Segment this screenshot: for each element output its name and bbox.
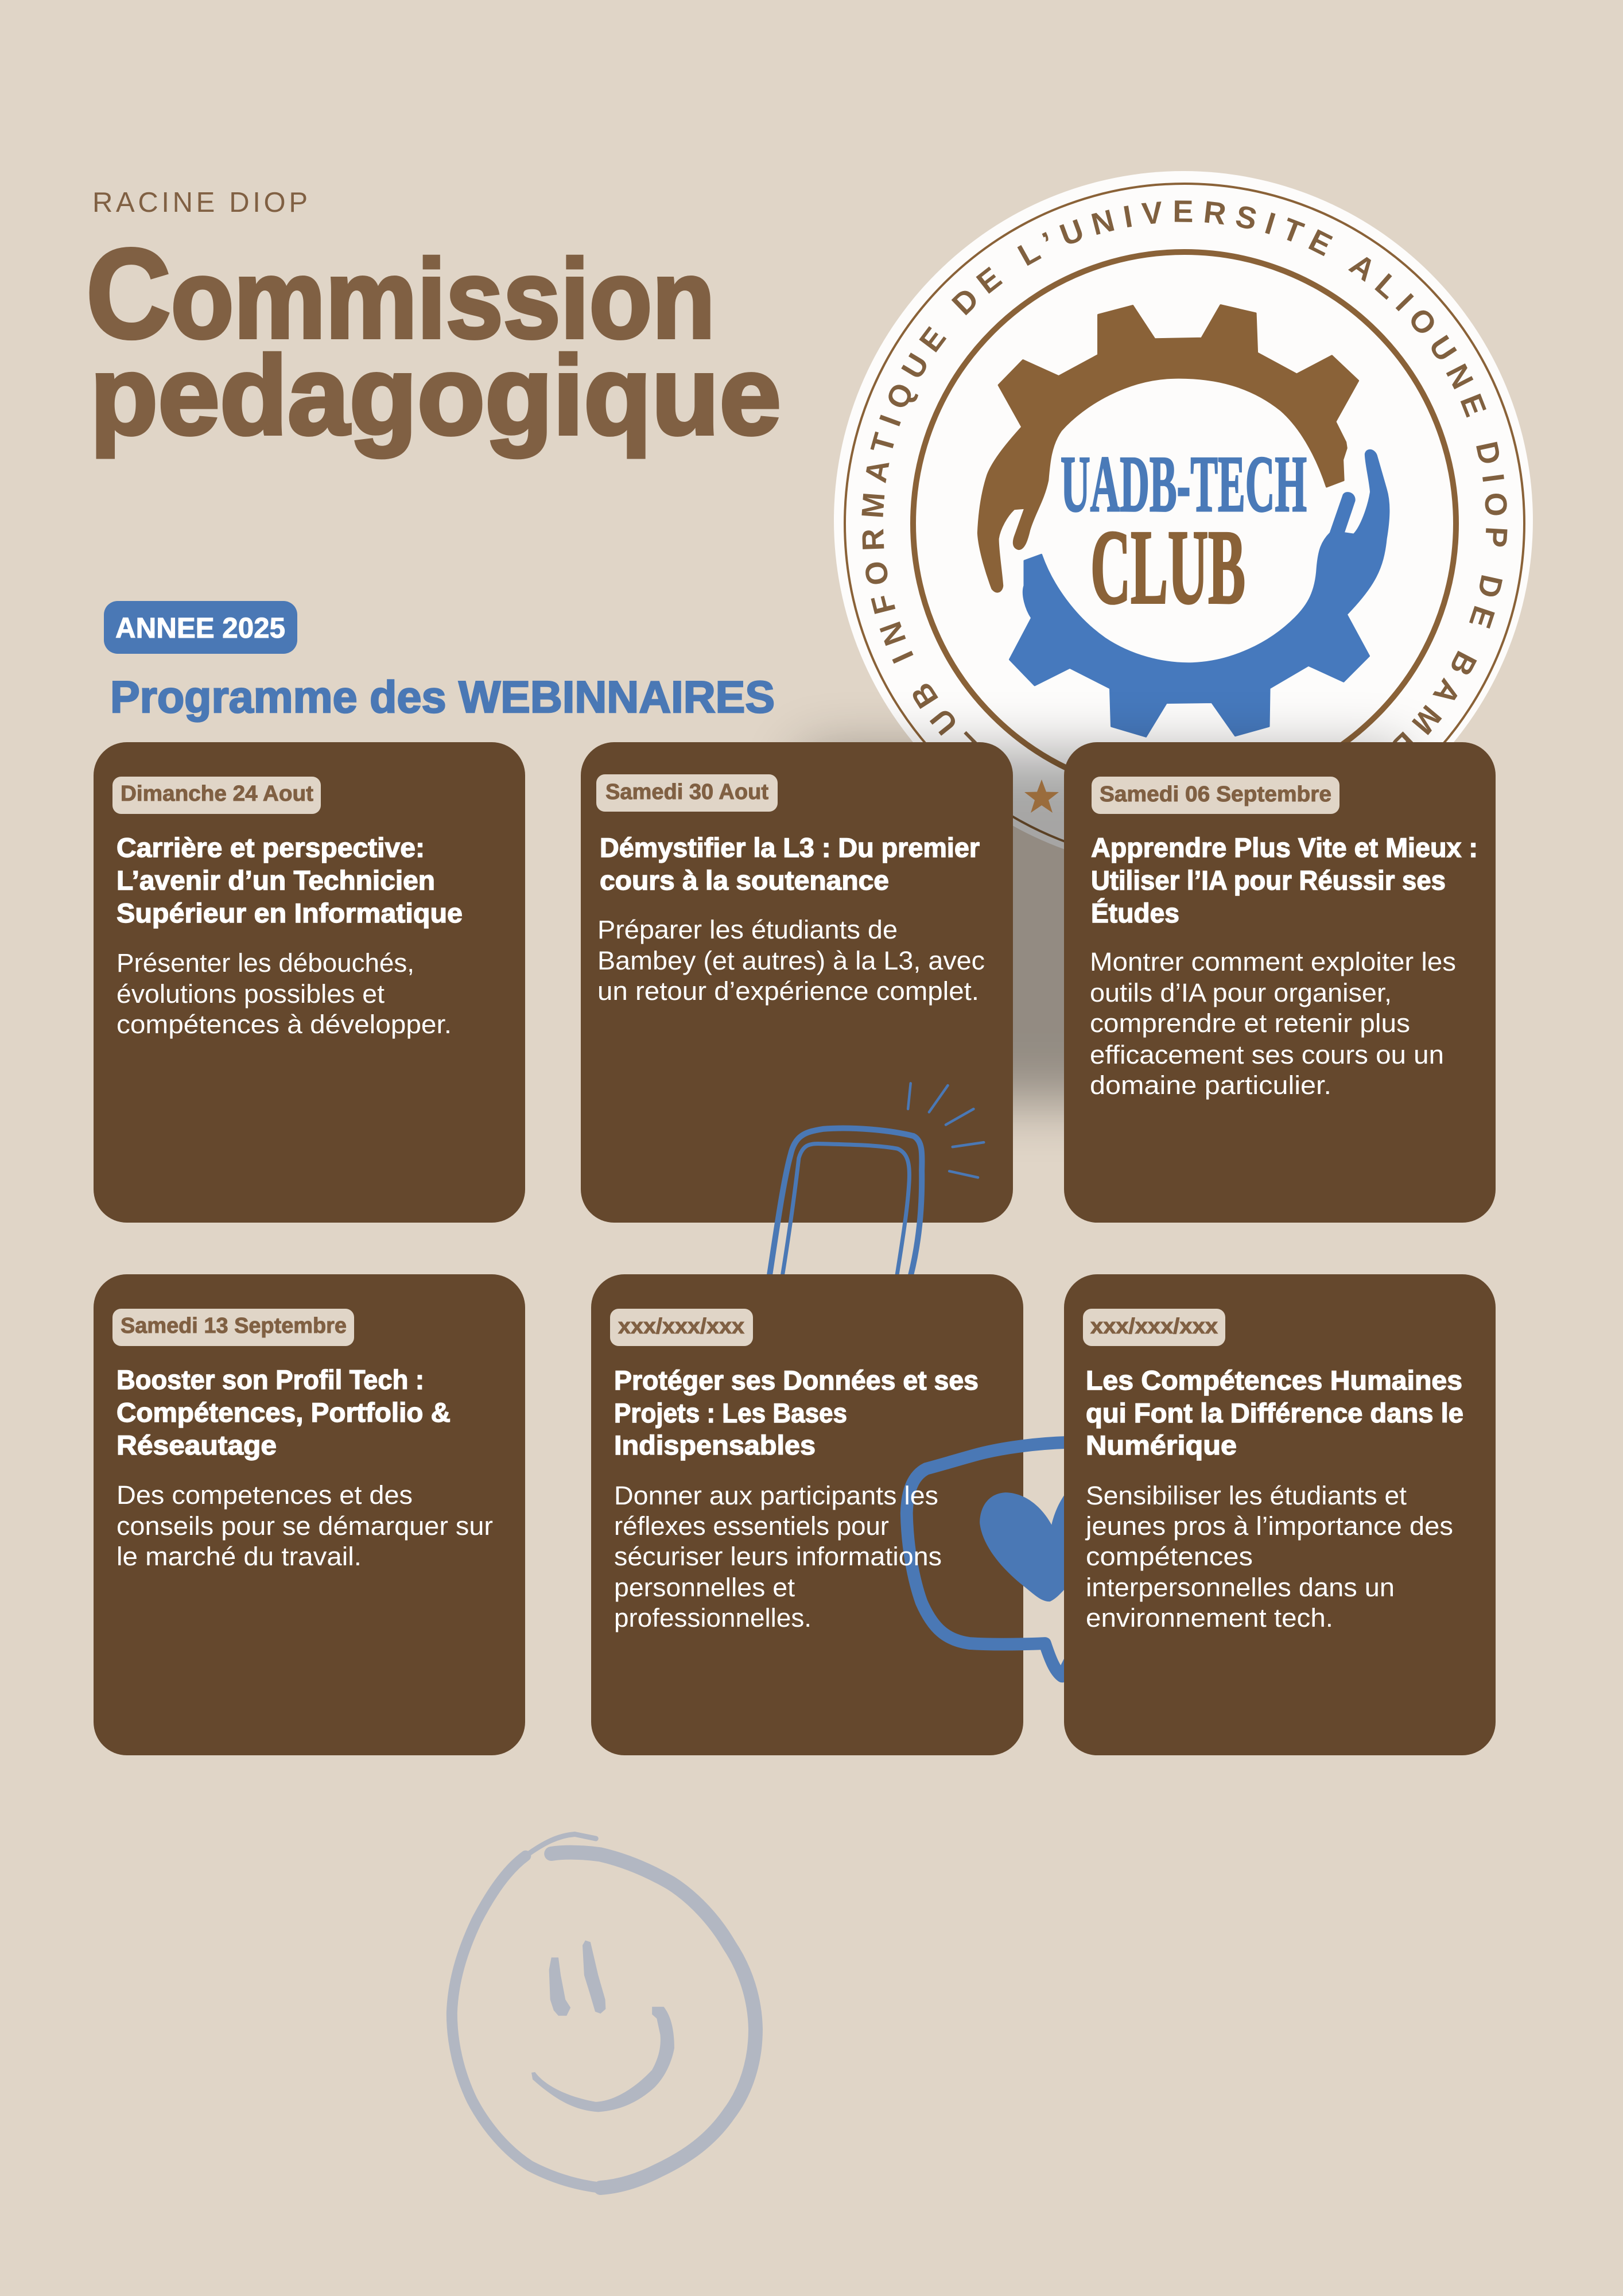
programme heading: Programme des WEBINNAIRES [110, 672, 775, 722]
logo: UADB-TECH club badge [834, 171, 1533, 850]
card description: personnelles et [614, 1573, 795, 1602]
date tag: Samedi 30 Aout [605, 780, 768, 804]
date tag: xxx/xxx/xxx [618, 1314, 744, 1339]
card description: professionnelles. [614, 1603, 812, 1632]
date tag: xxx/xxx/xxx [1090, 1314, 1218, 1339]
card description: Donner aux participants les [614, 1481, 938, 1510]
card title: Démystifier la L3 : Du premier [600, 832, 980, 863]
author name: RACINE DIOP [92, 187, 308, 218]
card title: Protéger ses Données et ses [614, 1365, 979, 1395]
card: Samedi 06 Septembre [1064, 742, 1496, 1223]
date tag [596, 774, 778, 812]
card title: Compétences, Portfolio & [117, 1397, 451, 1428]
date tag: Samedi 06 Septembre [1100, 782, 1331, 806]
title [86, 223, 781, 458]
card description: compétences à développer. [117, 1010, 452, 1039]
title: Commission [86, 223, 715, 365]
card: Protéger ses Données [591, 1274, 1071, 1755]
card title: Supérieur en Informatique [117, 898, 463, 928]
date tag [1092, 777, 1339, 814]
card description: outils d’IA pour organiser, [1090, 978, 1392, 1007]
card title: cours à la soutenance [600, 865, 889, 895]
card description: efficacement ses cours ou un [1090, 1040, 1444, 1069]
card description: Présenter les débouchés, [117, 948, 414, 978]
card title: Carrière et perspective: [117, 832, 425, 863]
date tag: Dimanche 24 Aout [121, 782, 313, 806]
card description: compétences [1086, 1542, 1253, 1571]
card description [597, 915, 985, 1006]
card description: Des competences et des [117, 1480, 413, 1510]
card description [117, 948, 452, 1039]
card description: sécuriser leurs informations [614, 1542, 942, 1571]
card title: qui Font la Différence dans le [1086, 1398, 1463, 1428]
icon: hand-drawn smiley [452, 1835, 755, 2188]
card title [1091, 832, 1478, 928]
card description: Montrer comment exploiter les [1090, 947, 1456, 976]
logo wordmark: CLUB: CLUB [1090, 509, 1245, 626]
card title [117, 832, 463, 928]
date tag [610, 1309, 753, 1346]
card: Samedi 30 Aout [581, 742, 1013, 1223]
card title: Apprendre Plus Vite et Mieux : [1091, 832, 1478, 863]
logo star [1024, 779, 1059, 813]
card title: L’avenir d’un Technicien [117, 865, 435, 895]
card title: Utiliser l’IA pour Réussir ses [1091, 865, 1446, 895]
date tag [112, 1309, 354, 1346]
logo gear: brown half with hand [978, 305, 1389, 736]
title: pedagogique [90, 333, 781, 458]
card description: le marché du travail. [117, 1542, 362, 1571]
card description [1090, 947, 1456, 1100]
card title: Réseautage [117, 1430, 277, 1460]
card title: Numérique [1086, 1430, 1237, 1460]
card description: interpersonnelles dans un [1086, 1573, 1395, 1602]
logo gear: blue half with hand [1009, 450, 1389, 736]
card description: conseils pour se démarquer sur [117, 1511, 493, 1541]
card description [117, 1480, 493, 1571]
card description: Préparer les étudiants de [597, 915, 898, 944]
card description: domaine particulier. [1090, 1071, 1331, 1100]
icon: speech bubble with heart [907, 1442, 1071, 1676]
card title [117, 1364, 451, 1460]
year badge [104, 601, 297, 654]
date tag: Samedi 13 Septembre [121, 1314, 347, 1338]
card title: Les Compétences Humaines [1086, 1365, 1462, 1395]
card description [614, 1481, 942, 1632]
soft shadow behind cards [803, 752, 1406, 1102]
card title: Études [1091, 898, 1179, 928]
card title [1086, 1365, 1463, 1460]
logo circular text: CLUB INFORMATIQUE DE L’UNIVERSITE ALIOUNE DIOP DE BAMBEY [861, 200, 1507, 742]
date tag [1083, 1309, 1225, 1346]
card title: Booster son Profil Tech : [117, 1364, 424, 1395]
card title [614, 1365, 979, 1460]
card: Les Compétences Humaines [1064, 1274, 1496, 1755]
card title: Indispensables [614, 1430, 816, 1460]
card: Samedi 13 Septembre [94, 1274, 525, 1755]
logo wordmark: UADB-TECH: UADB-TECH [1061, 440, 1307, 529]
card description [1085, 1481, 1453, 1632]
card description: Bambey (et autres) à la L3, avec [597, 946, 985, 975]
card title: Projets : Les Bases [614, 1398, 847, 1428]
card description: jeunes pros à l’importance des [1085, 1511, 1453, 1541]
card: Dimanche 24 Aout [94, 742, 525, 1223]
year badge: ANNEE 2025 [115, 612, 285, 644]
card description: Sensibiliser les étudiants et [1086, 1481, 1407, 1510]
card title [600, 832, 980, 895]
card description: évolutions possibles et [117, 979, 385, 1009]
card description: environnement tech. [1086, 1603, 1333, 1632]
card description: comprendre et retenir plus [1090, 1009, 1410, 1038]
icon: phone sketch with rays [770, 1083, 984, 1276]
card description: un retour d’expérience complet. [597, 976, 979, 1006]
date tag [112, 777, 321, 814]
card description: réflexes essentiels pour [614, 1511, 889, 1541]
